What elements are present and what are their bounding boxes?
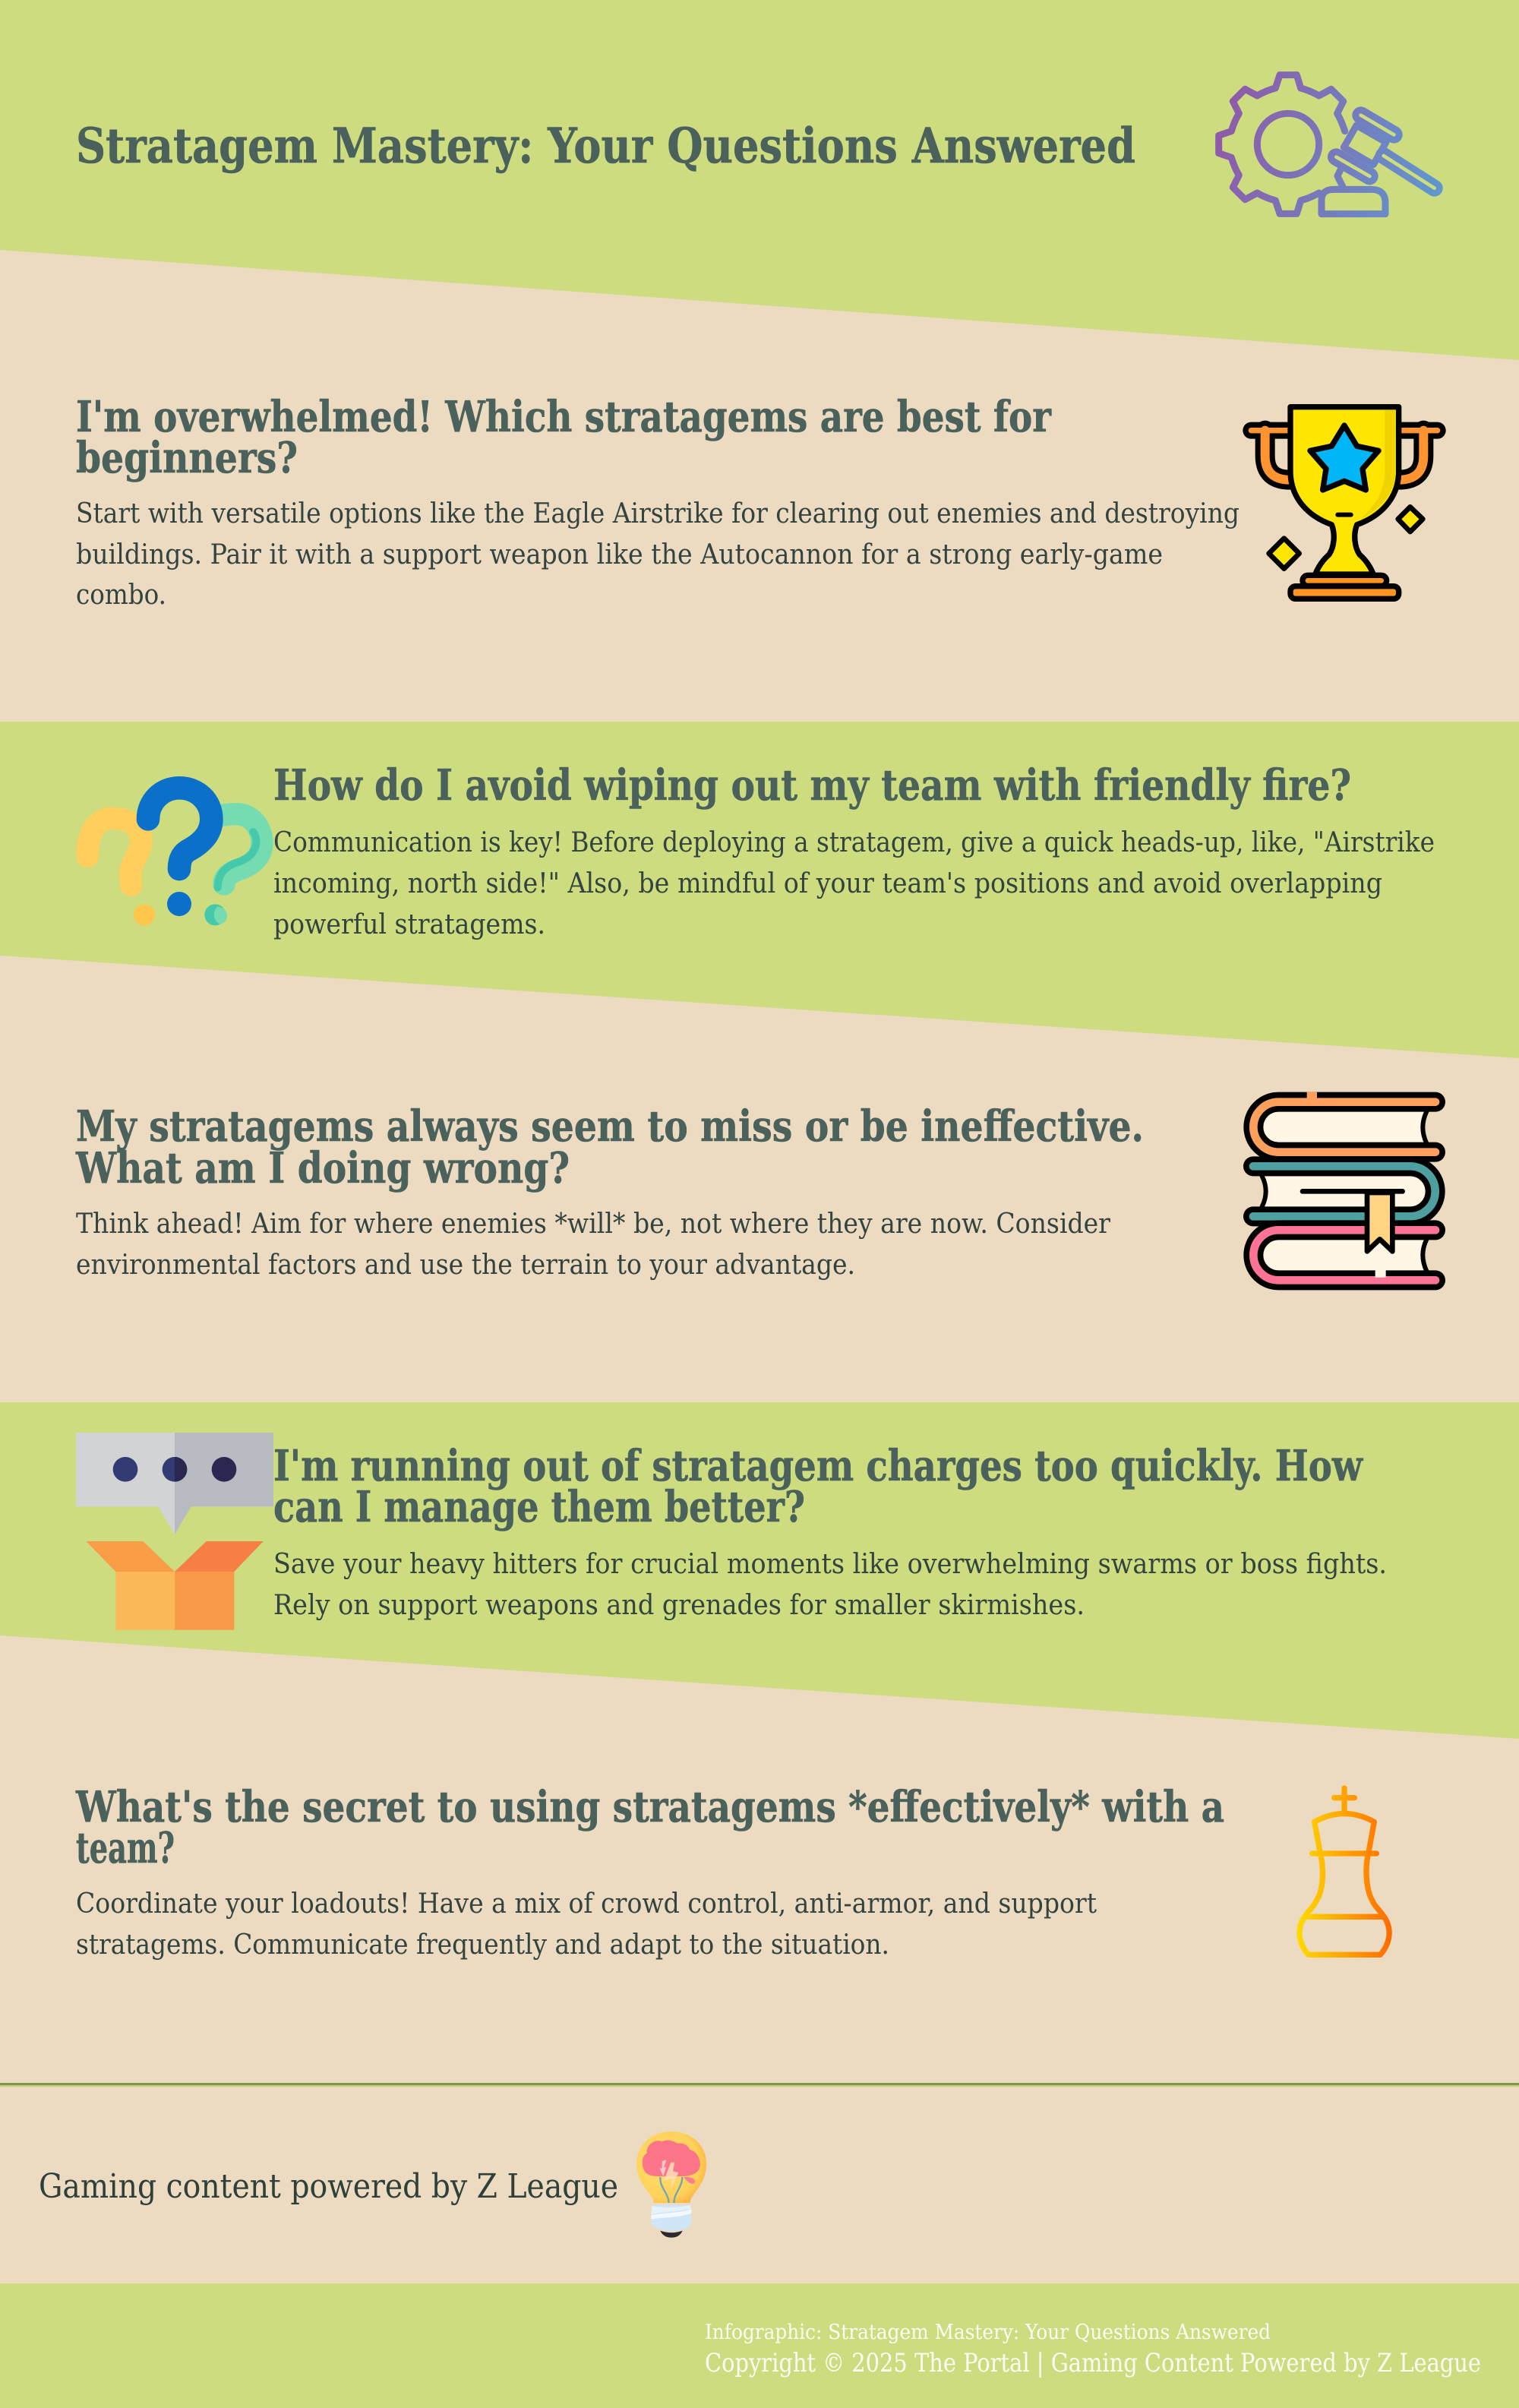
icon: stacked books [1253,1092,1435,1280]
answer text: missing stratagems [76,1209,1111,1281]
panel: stratagem charges question [0,1402,1519,1739]
answer text: teamwork: Coordinate your loadouts! Have a mix of crowd control, anti-armor, and support [76,1888,1097,1920]
title: Stratagem Mastery: Your Questions Answered [76,118,1135,175]
answer text: beginners: buildings. Pair it with a support weapon like the Autocannon for a strong early-game [76,539,1163,570]
heading: beginners: beginners? [76,433,298,483]
heading: missing stratagems: What am I doing wrong? [75,1143,570,1193]
answer text: missing stratagems: environmental factors and use the terrain to your advantage. [76,1250,855,1281]
icon: gear and gavel [1219,75,1435,214]
panel: beginners question [76,392,1438,611]
icon: brain light bulb [636,2131,706,2238]
answer text: teamwork [76,1888,1097,1961]
answer text: beginners [76,498,1240,611]
answer text: missing stratagems: Think ahead! Aim for where enemies *will* be, not where they are now. Consider [76,1209,1111,1240]
header panel [0,0,1519,360]
heading: stratagem charges: can I manage them better? [273,1482,805,1532]
divider line [0,2083,1519,2087]
panel: teamwork question [75,1782,1389,1961]
panel: friendly fire question [0,722,1519,1058]
heading: stratagem charges [273,1441,1363,1532]
answer text: friendly fire: Communication is key! Before deploying a stratagem, give a quick heads-up, like, "Airstrike [273,827,1435,858]
icon: trophy [1251,407,1438,599]
heading: teamwork [75,1782,1224,1873]
answer text: friendly fire: powerful stratagems. [273,909,545,940]
heading: beginners [76,392,1052,483]
footer band [0,2283,1519,2408]
heading: beginners: I'm overwhelmed! Which stratagems are best for [76,392,1052,442]
answer text: stratagem charges [273,1549,1387,1621]
answer text: friendly fire: incoming, north side!" Also, be mindful of your team's positions and avoid overlapping [273,868,1382,899]
heading: missing stratagems [75,1101,1144,1193]
powered by text: Gaming content powered by Z League [39,2167,618,2206]
answer text: stratagem charges: Rely on support weapons and grenades for smaller skirmishes. [273,1590,1085,1621]
panel: powered by [39,2131,706,2238]
answer text: stratagem charges: Save your heavy hitters for crucial moments like overwhelming swarms or boss fights. [273,1549,1387,1580]
icon: question marks [87,788,262,925]
heading: teamwork: team? [76,1823,175,1873]
answer text: friendly fire [273,827,1435,940]
footer title: Infographic: Stratagem Mastery: Your Questions Answered [705,2321,1271,2344]
heading: friendly fire: How do I avoid wiping out my team with friendly fire? [273,760,1351,811]
icon: chess king [1300,1788,1389,1955]
answer text: teamwork: stratagems. Communicate frequently and adapt to the situation. [76,1929,889,1961]
answer text: beginners: combo. [76,580,166,611]
heading: teamwork: What's the secret to using stratagems *effectively* with a [75,1782,1224,1832]
panel: missing stratagems question [75,1092,1435,1281]
heading: missing stratagems: My stratagems always seem to miss or be ineffective. [76,1101,1144,1152]
icon: speech bubble and box [76,1433,273,1630]
answer text: beginners: Start with versatile options like the Eagle Airstrike for clearing out enemies and destroying [76,498,1240,529]
